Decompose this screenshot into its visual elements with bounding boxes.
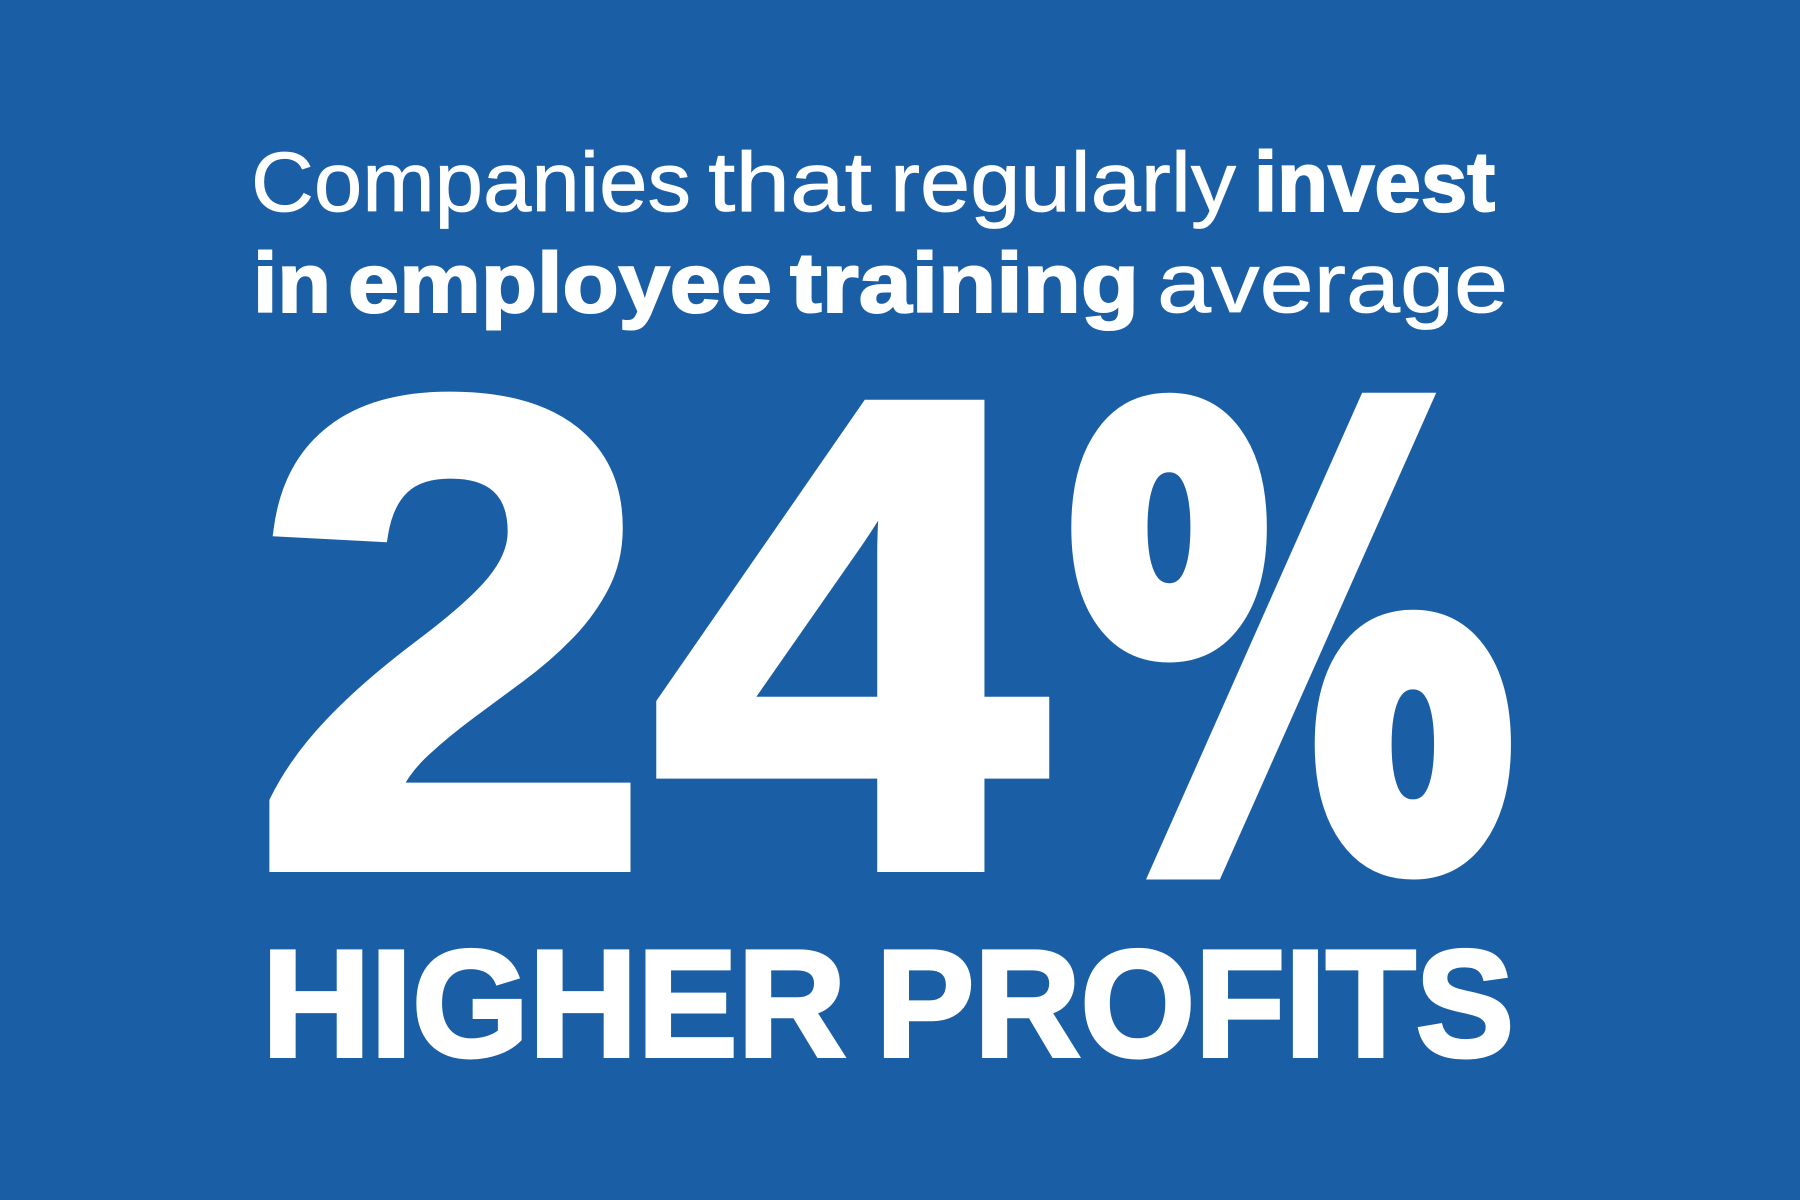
intro line 2: employee xyxy=(348,236,772,330)
intro line 1: invest xyxy=(1254,135,1495,229)
intro line 1: that xyxy=(708,135,872,229)
intro line 2: in xyxy=(253,236,331,330)
intro line 2: training xyxy=(790,236,1139,330)
big statistic: 24%: 4 xyxy=(653,263,1050,1007)
intro line 1: Companies xyxy=(251,135,691,229)
big statistic: 24% xyxy=(252,261,1514,1007)
intro line 1 xyxy=(251,135,1495,229)
intro line 2 xyxy=(253,236,1508,330)
subheading: higher profits: HIGHER xyxy=(262,919,846,1089)
big statistic: 24%: 2 xyxy=(252,261,652,1007)
intro text block xyxy=(251,135,1508,330)
subheading: higher profits: PROFITS xyxy=(876,919,1514,1089)
intro line 1: regularly xyxy=(890,135,1236,229)
big statistic: 24%: % xyxy=(1068,297,1514,999)
subheading: higher profits xyxy=(262,919,1514,1089)
intro line 2: average xyxy=(1157,236,1508,330)
